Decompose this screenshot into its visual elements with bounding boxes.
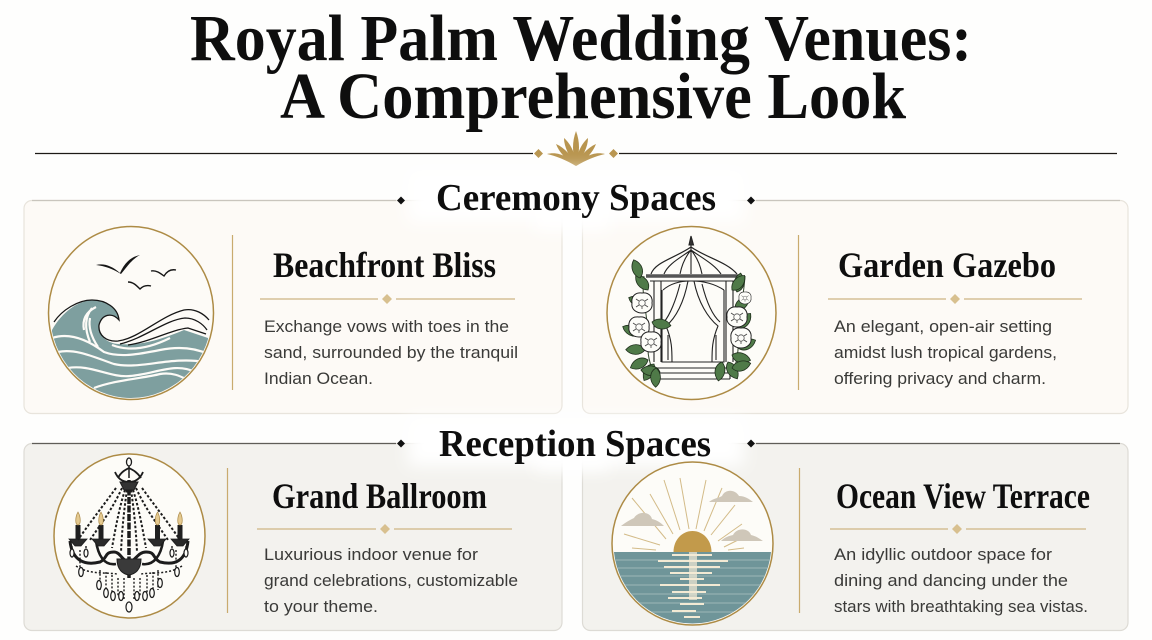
description: An elegant, open-air setting: [834, 317, 1052, 336]
vertical divider: [232, 235, 234, 390]
heading rule with diamond: [830, 524, 1086, 534]
card backgrounds: [24, 200, 1128, 630]
description: stars with breathtaking sea vistas.: [834, 597, 1088, 616]
description: dining and dancing under the: [834, 571, 1068, 590]
description: Indian Ocean.: [264, 369, 373, 388]
section heading: Reception Spaces: [32, 423, 1120, 465]
heading rule with diamond: [828, 294, 1082, 304]
heading: Ocean View Terrace: [836, 476, 1090, 516]
title: A Comprehensive Look: [280, 60, 906, 133]
description: grand celebrations, customizable: [264, 571, 518, 590]
section heading: Reception Spaces: Reception Spaces: [439, 423, 711, 465]
vertical divider: [798, 235, 800, 390]
panel: Ocean View Terrace card: [611, 461, 1090, 626]
white glow behind section headings: [408, 170, 744, 470]
heading rule with diamond: [257, 524, 512, 534]
description: sand, surrounded by the tranquil: [264, 343, 518, 362]
title divider with gold fan ornament: [35, 131, 1117, 166]
description: to your theme.: [264, 597, 378, 616]
section heading: Ceremony Spaces: Ceremony Spaces: [436, 177, 716, 219]
icon: chandelier: [54, 454, 205, 618]
description: [834, 545, 1088, 616]
vertical divider: [798, 468, 800, 613]
heading: Garden Gazebo: [838, 245, 1056, 285]
heading rule with diamond: [260, 294, 515, 304]
icon: ocean wave and birds: [48, 226, 214, 402]
description: offering privacy and charm.: [834, 369, 1046, 388]
title: [190, 2, 972, 133]
description: An idyllic outdoor space for: [834, 545, 1052, 564]
description: [264, 317, 518, 388]
description: Exchange vows with toes in the: [264, 317, 509, 336]
description: [834, 317, 1057, 388]
heading: Beachfront Bliss: [273, 245, 496, 285]
panel: Beachfront Bliss card: [48, 226, 517, 400]
description: amidst lush tropical gardens,: [834, 343, 1057, 362]
icon: sunset over the sea: [610, 462, 776, 628]
section heading: Ceremony Spaces: [32, 177, 1120, 219]
description: Luxurious indoor venue for: [264, 545, 478, 564]
panel: Garden Gazebo card: [582, 200, 1128, 414]
description: [264, 545, 518, 616]
vertical divider: [226, 468, 228, 613]
icon: gazebo with flowers: [607, 226, 776, 400]
heading: Grand Ballroom: [272, 476, 487, 516]
title: Royal Palm Wedding Venues:: [190, 2, 972, 75]
panel: Grand Ballroom card: [24, 444, 562, 630]
